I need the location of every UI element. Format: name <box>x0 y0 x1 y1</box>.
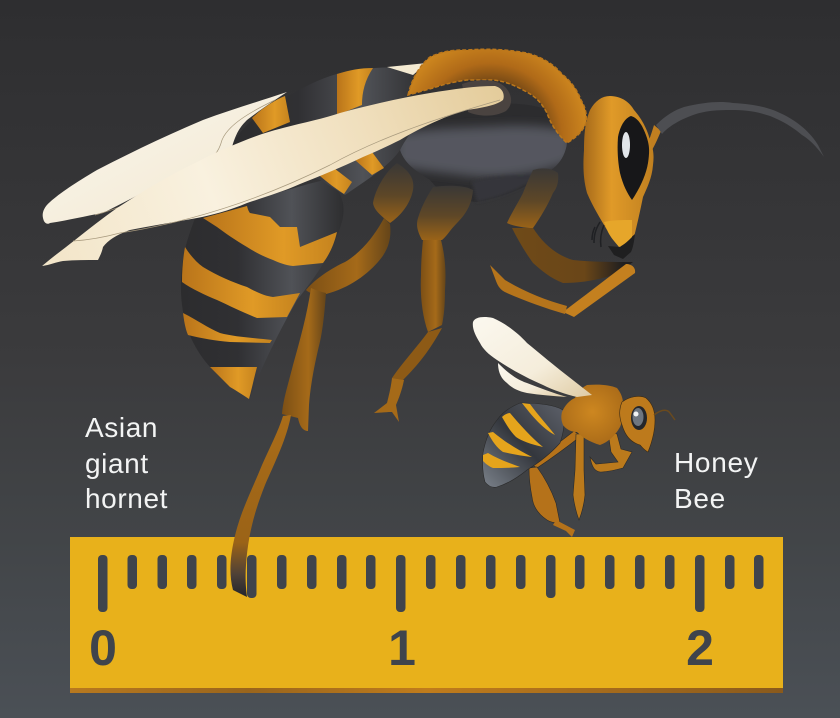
ruler bottom edge <box>70 688 783 693</box>
bee legs <box>529 431 632 537</box>
hornet wings <box>42 86 504 266</box>
eye highlight <box>622 132 630 158</box>
mandibles <box>608 234 635 259</box>
abdomen stripe 2 <box>182 247 300 318</box>
ruler number 1: 1 <box>388 620 416 676</box>
ruler number 2: 2 <box>686 620 714 676</box>
mouth bristles <box>592 222 604 247</box>
antenna base <box>647 125 661 150</box>
label: Asian giant hornet: Asian <box>85 412 158 443</box>
front wing <box>42 86 504 266</box>
honey bee illustration <box>473 317 675 537</box>
hornet arch (pronotum) <box>408 49 586 143</box>
label: Honey Bee: Bee <box>674 483 726 514</box>
thorax base <box>400 104 567 202</box>
hornet wing socket <box>462 80 511 116</box>
label: Asian giant hornet: hornet <box>85 483 168 514</box>
front wing vein <box>73 100 500 241</box>
thorax lower lobe <box>472 176 540 202</box>
label: Asian giant hornet: giant <box>85 448 149 479</box>
bee wing lower <box>498 363 567 397</box>
hornet middle leg <box>374 186 473 422</box>
ruler body <box>70 537 783 689</box>
hornet head <box>583 96 824 259</box>
bee wing upper <box>473 317 592 397</box>
hornet illustration <box>42 49 824 597</box>
compound eye <box>618 116 649 200</box>
waist stripe middle <box>337 68 373 115</box>
bee head <box>620 396 655 452</box>
clypeus <box>604 220 632 247</box>
bee thorax <box>561 385 623 445</box>
waist stripe lower <box>313 165 352 194</box>
abdomen base <box>181 180 344 398</box>
bee eye highlight <box>634 412 638 416</box>
abdomen tip <box>210 367 257 399</box>
hornet thorax <box>400 123 567 202</box>
hornet front leg <box>490 168 635 317</box>
hornet hind leg <box>230 163 413 597</box>
abdomen waist dark segments <box>230 67 425 195</box>
waist stripe left <box>252 96 290 133</box>
bee abdomen <box>483 403 564 487</box>
thorax light band <box>396 126 572 177</box>
abdomen stripe 1 <box>203 206 337 266</box>
bee eye iris <box>632 408 644 426</box>
bee eye <box>631 406 647 430</box>
bee abdomen stripes <box>483 403 555 468</box>
abdomen stripe 3 <box>183 313 272 343</box>
ruler number 0: 0 <box>89 620 117 676</box>
bee antenna <box>654 410 675 420</box>
antenna <box>656 102 824 157</box>
ruler <box>70 537 783 693</box>
hornet wing behind arch <box>387 63 427 75</box>
rear wing <box>43 92 287 224</box>
head capsule <box>583 96 654 247</box>
label: Honey Bee: Honey <box>674 447 758 478</box>
rear wing vein <box>95 100 275 215</box>
hornet abdomen <box>181 67 425 399</box>
ruler tick marks <box>98 555 764 612</box>
waist stripe lower small <box>355 152 384 175</box>
